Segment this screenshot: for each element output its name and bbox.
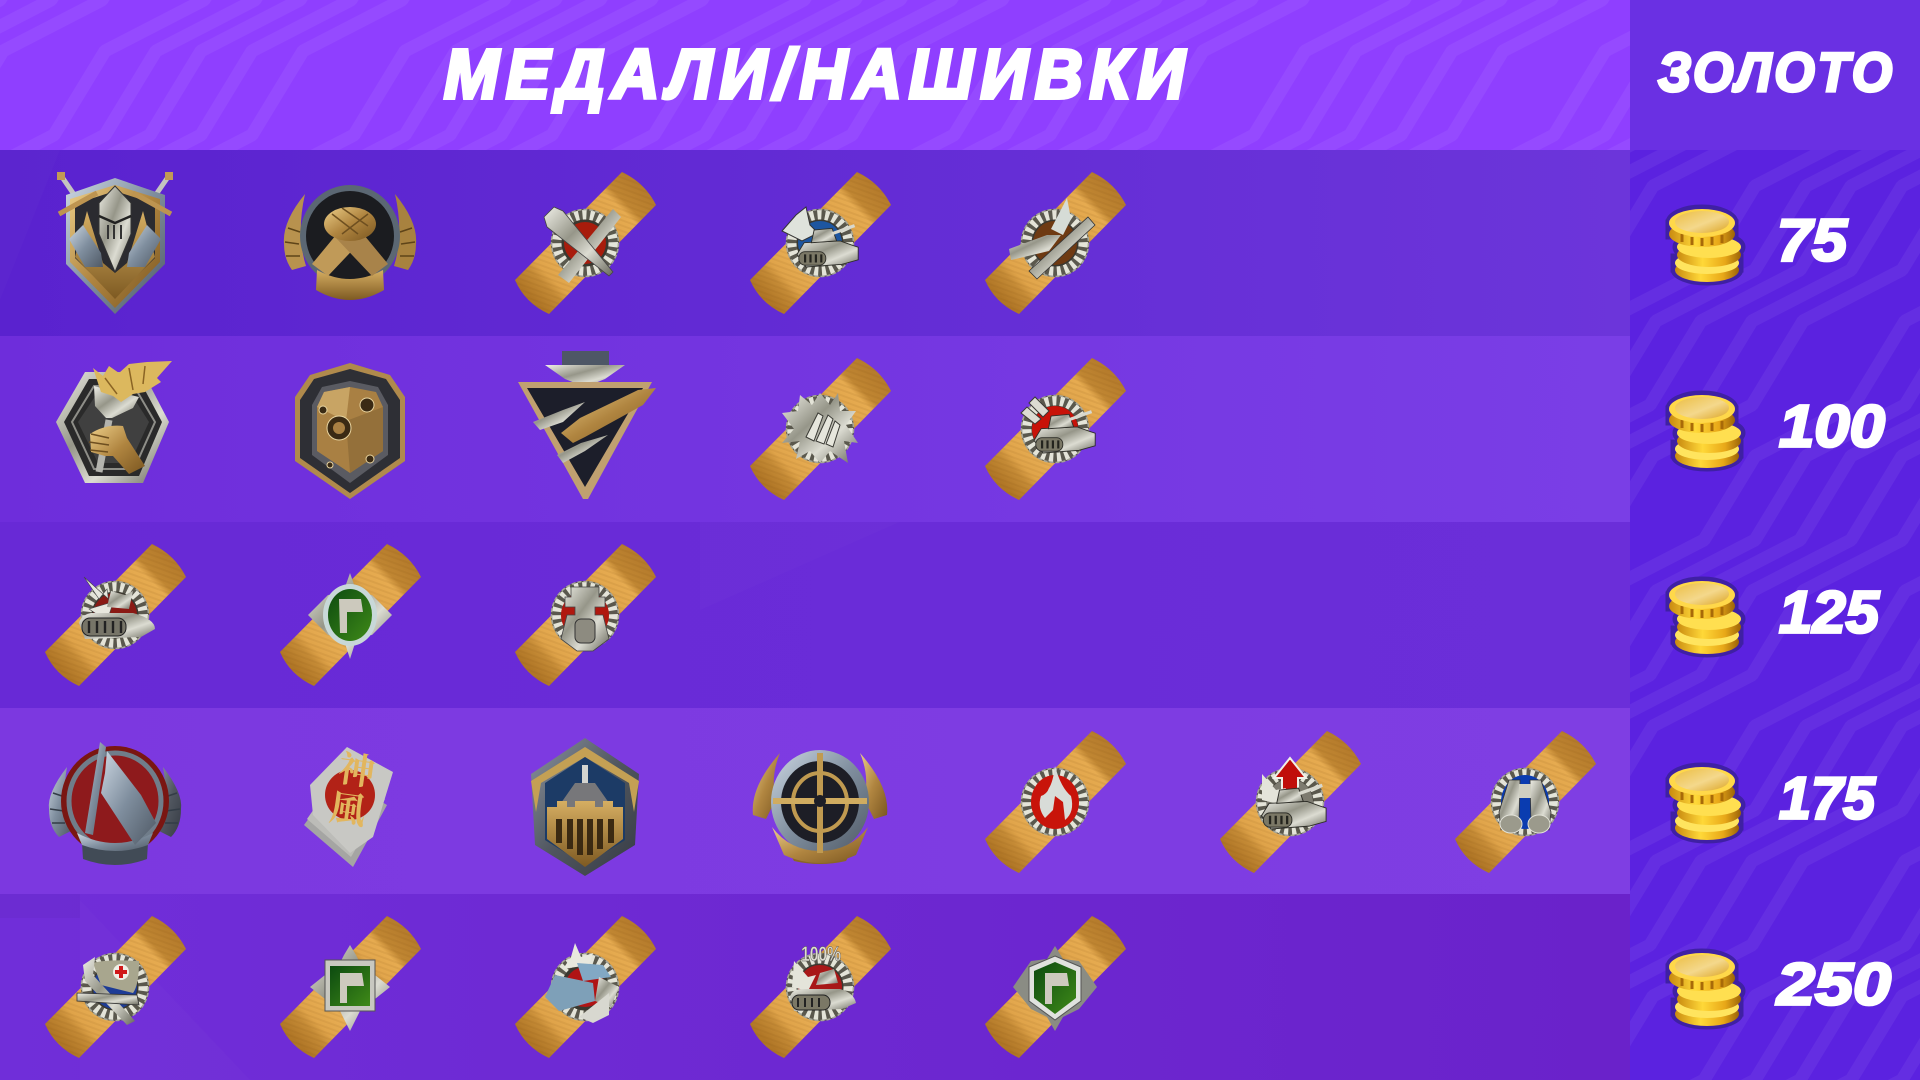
coins [1669, 952, 1742, 1026]
gold amount: 75 [1669, 208, 1848, 282]
gold amount: 175 [1669, 766, 1876, 840]
gold amount: 250: 250 [1776, 952, 1891, 1018]
ribbon: tank front badge [515, 544, 656, 686]
coins [1669, 208, 1742, 282]
gold amount: 250 [1669, 952, 1891, 1026]
gold amount: 75: 75 [1777, 208, 1848, 274]
gold column panel [1630, 0, 1920, 1080]
medal: paper cards with characters [304, 741, 393, 867]
ribbon: fire badge [985, 731, 1126, 873]
medal: armour with bullet holes [295, 363, 405, 499]
medal: torch hexagon [56, 361, 172, 483]
ribbon: tank with up arrow badge [1220, 731, 1361, 873]
title: МЕДАЛИ/НАШИВКИ [444, 36, 1187, 113]
ribbon: 100% tank badge: 100% [801, 943, 841, 966]
ribbon: shield green flag [985, 916, 1126, 1058]
medal: paper cards with characters: 神 [336, 741, 378, 796]
gold amount: 125 [1669, 580, 1880, 654]
medal: crosshair [753, 750, 887, 864]
ribbon: tank burst badge [45, 544, 186, 686]
column heading: gold: ЗОЛОТО [1658, 43, 1892, 103]
coins [1669, 580, 1742, 654]
ribbon: blue tank badge [750, 172, 891, 314]
header band [0, 0, 1630, 150]
gold amount: 125: 125 [1779, 580, 1880, 646]
background rows [0, 150, 1630, 1080]
ribbon: tanks with arrow [515, 916, 656, 1058]
medal: clasped arms [284, 185, 416, 300]
medal: red flag [49, 742, 181, 865]
medal: castle tower [531, 738, 639, 876]
gold amount: 175: 175 [1779, 766, 1876, 832]
medal: knight shield [57, 172, 173, 314]
medal: triangle with shells [518, 351, 656, 499]
ribbon: repair tools badge [45, 916, 186, 1058]
ribbon: shell badge [515, 172, 656, 314]
gold amount: 100 [1669, 394, 1885, 468]
ribbon: binoculars badge [1455, 731, 1596, 873]
ribbon: square green flag [280, 916, 421, 1058]
ribbon: cannon badge [985, 172, 1126, 314]
gold amount: 100: 100 [1779, 394, 1885, 460]
ribbon: bullets burst badge [750, 358, 891, 500]
coins [1669, 394, 1742, 468]
coins [1669, 766, 1742, 840]
ribbon: green flag star [280, 544, 421, 686]
ribbon: red tank and bullets badge [985, 358, 1126, 500]
medal: paper cards with characters: 風 [327, 780, 369, 835]
ribbon: 100% tank badge [750, 916, 891, 1058]
